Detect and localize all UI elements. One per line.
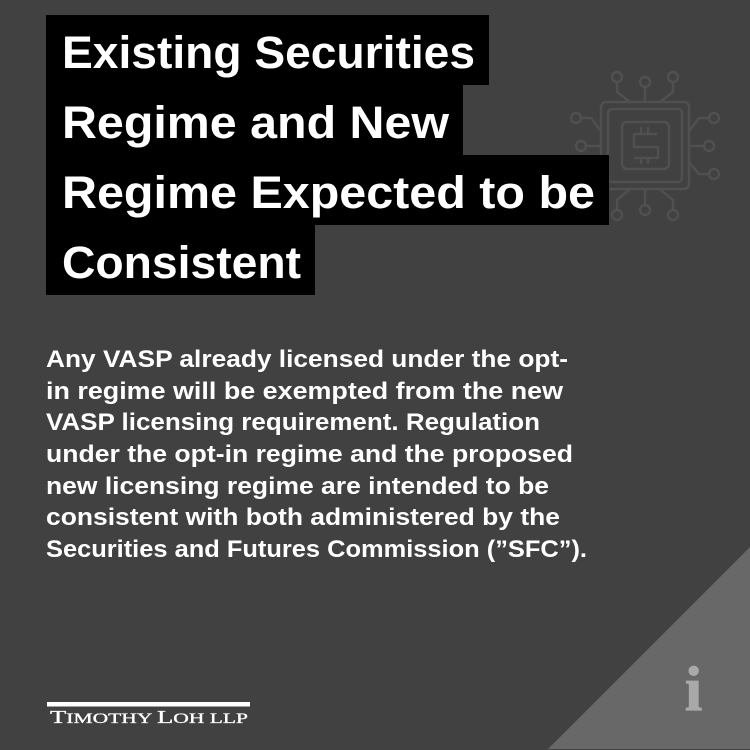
body text: under the opt-in regime and the proposed [46, 441, 573, 468]
icon: circuit chip with dollar sign [571, 72, 719, 220]
logo: Timothy Loh LLP: T IMOTHY L OH LLP [50, 707, 248, 727]
title [46, 15, 609, 295]
corner triangle [548, 547, 750, 749]
title: Existing Securities [62, 27, 475, 78]
title: Regime Expected to be [62, 167, 595, 218]
body text: new licensing regime are intended to be [46, 473, 549, 500]
body text: VASP licensing requirement. Regulation [46, 409, 540, 436]
body text: consistent with both administered by the [46, 504, 560, 531]
title: Regime and New [62, 97, 450, 148]
body text [46, 346, 587, 563]
icon: information letter i: i [685, 653, 702, 724]
body text: Securities and Futures Commission (”SFC”). [46, 536, 587, 563]
title: Consistent [62, 237, 301, 288]
logo: Timothy Loh LLP [47, 702, 250, 727]
body text: in regime will be exempted from the new [46, 378, 564, 405]
body text: Any VASP already licensed under the opt- [46, 346, 568, 373]
